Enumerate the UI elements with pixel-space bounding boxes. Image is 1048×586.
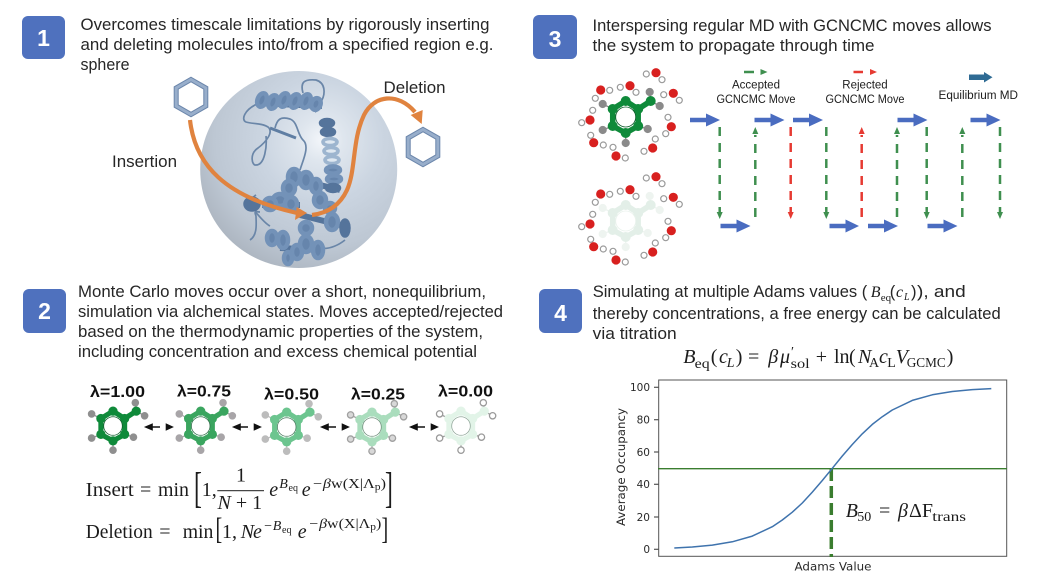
lambda labels: λ=0.75	[177, 384, 231, 400]
insertion probability equation: ]	[385, 464, 393, 512]
panel 3 description: the system to propagate through time	[592, 36, 874, 55]
insertion probability equation: =	[140, 479, 151, 501]
Adams value equation: L	[887, 356, 896, 371]
insertion probability equation: eq	[288, 483, 298, 494]
B50 equation: trans	[932, 510, 966, 525]
insertion probability equation: Insert	[86, 479, 134, 501]
legend: accepted move: Accepted	[732, 80, 780, 92]
badge 3: 3	[549, 26, 561, 52]
deletion probability equation: [	[216, 512, 222, 546]
deletion probability equation: p	[370, 522, 376, 533]
badge 4	[539, 289, 582, 333]
Adams value equation: μ	[779, 346, 790, 368]
label: deletion: Deletion	[384, 78, 446, 97]
lambda labels: λ=0.00	[438, 384, 493, 400]
insertion probability equation	[86, 464, 393, 514]
panel 4 description: Simulating at multiple Adams values (	[593, 282, 868, 301]
50 percent line	[658, 468, 1007, 470]
insertion probability equation: p	[375, 482, 381, 493]
B50 equation: =	[879, 500, 890, 522]
Adams value equation: N	[857, 346, 873, 368]
panel 3: MD and GCNCMC moves	[533, 15, 1018, 265]
legend: rejected move: Rejected	[842, 80, 888, 92]
legend: accepted move	[716, 69, 796, 106]
insertion probability equation: )	[381, 477, 386, 492]
y axis ticks and labels	[630, 382, 659, 556]
panel 4: titration	[539, 282, 1007, 574]
lambda labels: λ=1.00	[90, 384, 145, 401]
icon: deleted molecule	[408, 130, 438, 164]
panel 2 description: simulation via alchemical states. Moves accepted/rejected	[78, 302, 503, 321]
badge 1: 1	[37, 25, 50, 51]
panel 4 description: L	[903, 292, 910, 303]
Adams value equation: A	[869, 356, 880, 371]
protein ribbon	[244, 80, 349, 264]
insertion probability equation: min	[158, 479, 189, 501]
Adams value equation: V	[896, 346, 911, 368]
panel 1 description: sphere	[80, 55, 130, 74]
B50 equation	[846, 500, 966, 525]
legend: rejected move	[826, 69, 904, 106]
deletion probability equation: )	[376, 517, 382, 532]
y axis ticks and labels: 60	[637, 447, 650, 459]
panel 2 description: Monte Carlo moves occur over a short, nonequilibrium,	[78, 282, 486, 301]
Adams value equation: ′	[791, 345, 794, 360]
insertion probability equation: −βw(X|Λ	[312, 477, 369, 492]
molecule with water shell	[579, 68, 682, 161]
B50 equation: ΔF	[909, 500, 933, 522]
y axis title: Average Occupancy	[614, 408, 628, 526]
deletion probability equation: eq	[282, 525, 291, 536]
chart: occupancy titration curve	[614, 380, 1007, 574]
deletion probability equation: e	[253, 521, 262, 543]
badge 1	[22, 16, 65, 59]
Adams value equation: =	[748, 346, 759, 368]
panel 4 description: thereby concentrations, a free energy can be calculated	[593, 304, 1001, 323]
arrow: deletion	[312, 98, 423, 215]
panel 2 description: including concentration and excess chemical potential	[78, 342, 477, 361]
y axis ticks and labels: 20	[637, 512, 650, 524]
panel 4 description: ), and	[917, 282, 966, 301]
Adams value equation: (	[711, 346, 718, 368]
Adams value equation: )	[736, 346, 742, 368]
lambda labels: λ=0.25	[351, 386, 405, 404]
legend: rejected move: GCNCMC Move	[826, 94, 904, 106]
deletion probability equation	[86, 512, 388, 546]
panel 4 description: c	[896, 284, 903, 301]
Adams value equation: )	[947, 346, 953, 368]
legend: equilibrium MD	[938, 72, 1018, 102]
Adams value equation: +	[816, 346, 827, 368]
y axis ticks and labels: 80	[637, 414, 650, 426]
double-headed arrows	[146, 424, 437, 430]
dashed move arrows	[717, 127, 1003, 219]
Adams value equation	[683, 345, 953, 372]
deletion probability equation: ]	[382, 512, 388, 546]
badge 2	[23, 289, 66, 333]
deletion probability equation: min	[183, 521, 213, 543]
Adams value equation: (	[849, 346, 856, 368]
panel 2 description	[78, 282, 503, 361]
Adams value equation: ln	[834, 346, 850, 368]
badge 2: 2	[38, 298, 51, 324]
panel 1: insertion and deletion	[22, 15, 494, 268]
panel 4 description: (	[890, 282, 896, 301]
lambda labels	[90, 384, 493, 404]
panel 3 description	[592, 16, 992, 55]
occupancy curve	[674, 389, 991, 548]
B50 equation: B	[846, 500, 858, 522]
icon: molecule to insert	[176, 80, 206, 114]
panel 4 description: eq	[881, 292, 892, 304]
insertion probability equation: e	[302, 479, 311, 501]
insertion probability equation: N + 1	[216, 492, 262, 514]
deletion probability equation: −B	[263, 519, 282, 534]
insertion probability equation: 1,	[202, 479, 217, 501]
lambda labels: λ=0.50	[264, 386, 319, 404]
label: insertion: Insertion	[112, 152, 177, 171]
panel 4 description: )	[911, 282, 917, 301]
deletion probability equation: −βw(X|Λ	[308, 517, 365, 532]
panel 2: alchemical states	[23, 282, 503, 546]
deletion probability equation: 1,	[222, 521, 237, 543]
water shell with ghost molecule	[579, 172, 682, 265]
deletion probability equation: Deletion	[86, 521, 153, 543]
x axis title: Adams Value	[794, 560, 872, 574]
Adams value equation: B	[683, 346, 696, 368]
Adams value equation: c	[879, 346, 888, 368]
panel 4 description	[593, 282, 1001, 343]
panel 3 description: Interspersing regular MD with GCNCMC moves allows	[592, 16, 992, 35]
Adams value equation: GCMC	[907, 356, 946, 371]
B50 dashed marker	[830, 469, 833, 557]
insertion probability equation: 1	[236, 465, 246, 487]
insertion probability equation: B	[279, 477, 288, 492]
alchemical molecule series	[88, 400, 496, 454]
Adams value equation: sol	[791, 357, 810, 372]
Adams value equation: L	[726, 356, 735, 371]
deletion probability equation: N	[240, 521, 256, 543]
panel 2 description: based on the thermodynamic properties of the system,	[78, 322, 483, 341]
badge 4: 4	[554, 300, 567, 326]
panel 4 description: B	[871, 284, 881, 301]
panel 4 description: via titration	[593, 324, 677, 343]
deletion probability equation: =	[159, 521, 171, 543]
panel 1 description: and deleting molecules into/from a specified region e.g.	[80, 35, 494, 54]
insertion probability equation: e	[269, 479, 278, 501]
B50 equation: 50	[857, 510, 871, 525]
B50 equation: β	[897, 500, 908, 522]
y axis ticks and labels: 40	[637, 479, 650, 491]
legend: accepted move: GCNCMC Move	[716, 94, 796, 106]
y axis ticks and labels: 0	[643, 544, 650, 556]
plot frame	[659, 380, 1007, 556]
sphere	[200, 71, 397, 268]
Adams value equation: c	[719, 346, 728, 368]
Adams value equation: β	[767, 346, 778, 368]
panel 1 description: Overcomes timescale limitations by rigorously inserting	[80, 15, 490, 34]
y axis ticks and labels: 100	[630, 382, 650, 394]
badge 3	[533, 15, 577, 59]
legend: equilibrium MD: Equilibrium MD	[938, 90, 1018, 102]
Adams value equation: eq	[695, 357, 710, 372]
panel 1 description	[80, 15, 494, 74]
insertion probability equation: [	[194, 464, 202, 512]
arrow: insertion	[190, 120, 307, 220]
deletion probability equation: e	[298, 521, 307, 543]
blue MD arrows	[690, 114, 1000, 232]
